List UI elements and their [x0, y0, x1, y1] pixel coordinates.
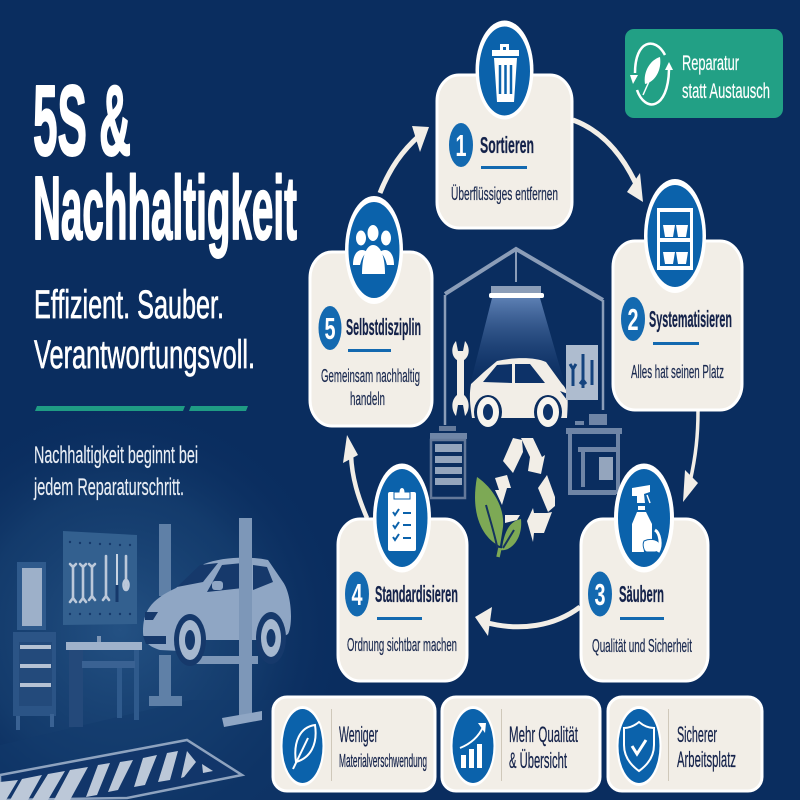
panel: step 4 Standardisieren: [338, 464, 467, 681]
tool board: [566, 345, 598, 400]
subtitle: Verantwortungsvoll.: [34, 333, 255, 377]
icon: trash can: [476, 20, 534, 120]
arrow: step 1 to step 2: [573, 120, 643, 202]
wrench: [452, 341, 469, 416]
green accent rule: [35, 406, 248, 411]
garage frame: [445, 249, 603, 425]
benefit text: [509, 722, 578, 773]
panel: step 4 Standardisieren: Standardisieren: [375, 581, 458, 607]
step description: Gemeinsam nachhaltig: [321, 366, 420, 386]
step description: Alles hat seinen Platz: [631, 362, 724, 382]
icon: team of people: [345, 196, 403, 304]
panel: step 3 Säubern: Säubern: [619, 581, 664, 607]
benefit text: & Übersicht: [509, 748, 567, 773]
front lift post: [222, 518, 262, 727]
icon: shelf: [644, 179, 706, 293]
panel: step 1 Sortieren: [437, 20, 572, 228]
tagline: jedem Reparaturschritt.: [33, 474, 184, 501]
cabinet with mirror: [13, 562, 56, 730]
ceiling lamp with light beam: [470, 286, 565, 385]
step description: Ordnung sichtbar machen: [347, 635, 457, 655]
step description: handeln: [350, 389, 385, 409]
subtitle: Effizient. Sauber.: [34, 283, 224, 327]
icon: leaf: [280, 706, 324, 786]
benefit text: Weniger: [339, 722, 378, 747]
step number: [588, 572, 612, 616]
icon: spray bottle: [614, 464, 674, 572]
step number: [621, 297, 645, 341]
callout: Reparatur statt Austausch: [625, 29, 783, 118]
green leaf: [475, 477, 521, 557]
panel: step 5 Selbstdisziplin: [310, 196, 432, 426]
benefit text: [339, 722, 427, 771]
benefit text: Sicherer: [677, 722, 717, 747]
step number: 1: [456, 128, 466, 163]
step number: 4: [352, 577, 363, 612]
panel: benefit Weniger Materialverschwendung: Materialverschwendung: [339, 751, 427, 771]
benefit text: [677, 722, 736, 772]
pegboard with tools: [63, 531, 137, 625]
step number: 5: [324, 311, 336, 346]
panel: step 3 Säubern: [581, 464, 708, 681]
workshop scene illustration: [0, 518, 300, 800]
callout text: Reparatur: [682, 52, 739, 75]
benefit text: Mehr Qualität: [509, 722, 578, 747]
panel: step 2 Systematisieren: [613, 179, 742, 410]
step number: 2: [628, 302, 638, 337]
arrow: step 5 to step 1: [380, 126, 429, 193]
benefit text: Arbeitsplatz: [677, 747, 736, 772]
tagline: [33, 442, 198, 501]
title: 5S &: [33, 65, 131, 177]
arrow: step 3 to step 4: [475, 607, 580, 636]
title: [33, 65, 297, 259]
subtitle: [34, 283, 255, 377]
back lift post: [149, 524, 182, 706]
central garage illustration: [430, 249, 622, 557]
step description: Qualität und Sicherheit: [592, 636, 692, 656]
right desk: [566, 414, 622, 495]
panel: step 5 Selbstdisziplin: Selbstdisziplin: [346, 314, 421, 340]
icon: safety shield: [616, 706, 662, 786]
step number: [449, 123, 473, 167]
lifted car: [143, 558, 291, 666]
panel: benefit Weniger Materialverschwendung: [273, 697, 435, 791]
panel: benefit Mehr Qualität und Übersicht: [442, 697, 600, 791]
white car: [470, 358, 568, 429]
hazard floor marking: [0, 740, 242, 800]
tagline: Nachhaltigkeit beginnt bei: [34, 442, 198, 469]
icon: recycling leaf: [630, 44, 673, 104]
step number: 3: [594, 577, 606, 612]
workbench: [66, 636, 142, 727]
icon: clipboard checklist: [373, 464, 431, 572]
step description: [321, 366, 420, 409]
left drawer unit: [430, 426, 467, 498]
icon: rising bar chart: [450, 706, 496, 786]
step number: [318, 306, 342, 350]
arrow: step 4 to step 5: [343, 435, 367, 518]
arrow: step 2 to step 3: [683, 411, 698, 502]
step heading: Sortieren: [480, 132, 534, 158]
recycling symbol: [495, 438, 555, 542]
step description: Überflüssiges entfernen: [451, 184, 558, 204]
step number: [345, 572, 369, 616]
callout text: [682, 52, 770, 103]
text: Nachhaltigkeit: [33, 159, 297, 259]
panel: benefit Sicherer Arbeitsplatz: [608, 697, 762, 791]
